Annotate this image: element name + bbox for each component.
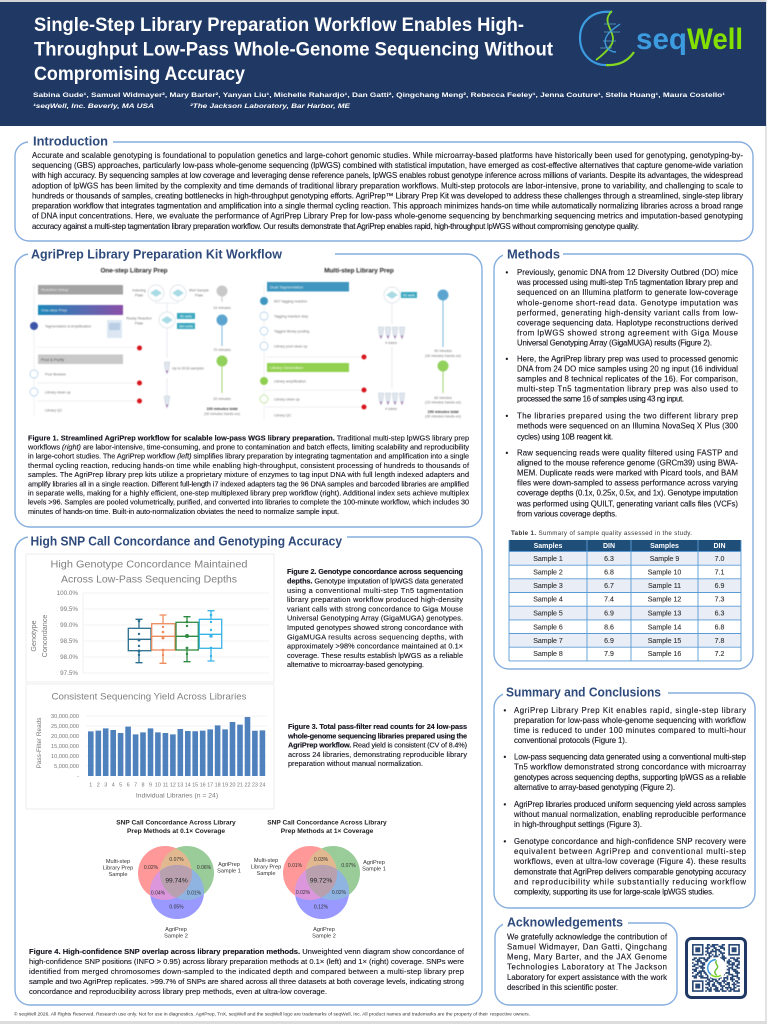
table: sample quality: 6.7	[604, 583, 614, 590]
table: sample quality: 7.0	[715, 556, 724, 563]
summary bullets: preparation for low-pass whole-genome sequencing with workflow	[514, 716, 746, 725]
chart: venn diagram at 0.1x coverage: 0.07%	[169, 857, 184, 863]
chart: venn diagram at 1x coverage: Library Prep	[251, 864, 281, 870]
summary bullets: time is reduced to under 100 minutes compared to multi-hour	[514, 726, 746, 735]
multi-step workflow: Tagged library pooling	[274, 330, 309, 334]
figure 2 caption: Universal Genotyping Array (GigaMUGA) genotypes.	[287, 614, 463, 623]
multi-step workflow: Library QC	[274, 414, 292, 418]
chart: pass-filter reads bar chart: 5,000,000	[54, 764, 79, 770]
multi-step workflow: Multi-step Library Prep	[324, 268, 394, 274]
chart: genotype concordance box plot: 99.5%	[60, 606, 78, 613]
methods bullets: sequenced on an Illumina platform to generate low-coverage	[517, 288, 738, 297]
summary bullets: •	[504, 837, 506, 846]
chart: venn diagram at 0.1x coverage: Prep Methods at 0.1× Coverage	[127, 828, 225, 835]
chart: pass-filter reads bar chart: 8	[142, 782, 144, 788]
chart: genotype concordance box plot: 98.5%	[60, 638, 78, 645]
chart: genotype concordance box plot: High Genotype Concordance Maintained	[50, 560, 248, 570]
summary bullets: AgriPrep libraries produced uniform sequencing yield across samples	[514, 800, 746, 809]
one-step workflow: Plate	[135, 294, 143, 298]
affiliations	[33, 103, 351, 110]
table: sample quality	[509, 540, 741, 661]
chart: pass-filter reads bar chart: 24	[259, 782, 265, 788]
summary bullets: equivalent between AgriPrep and conventional multi-step	[514, 847, 747, 856]
one-step workflow: Plate	[195, 294, 203, 298]
chart: pass-filter reads bar chart: Individual Libraries (n = 24)	[136, 792, 218, 800]
table: sample quality: Sample 7	[533, 638, 563, 645]
figure 4 caption: sample and two AgriPrep replicates. >99.7% of SNPs are shared across all three datasets at both coverage levels, indicating strong	[29, 977, 464, 986]
text: introduction body: adoption of lpWGS has been limited by the complexity and time demands of traditional library preparation workflows. Multi-step protocols are labor-intensive, prone to variability, and challenging to scale to	[32, 181, 744, 190]
text: introduction body: preparation workflow that integrates tagmentation and amplification into a single thermal cycling reaction. This approach minimizes hands-on time while automatically normalizing libraries across a broad range	[32, 202, 743, 210]
chart: pass-filter reads bar chart: 5	[119, 782, 122, 788]
figure 1 caption: in large-cohort studies. The AgriPrep workflow (left) simplifies library preparation by integrating tagmentation and amplification into a single	[28, 452, 469, 461]
multi-step workflow: (45 minutes hands-on)	[425, 414, 461, 418]
chart: pass-filter reads bar chart: 20	[230, 782, 236, 788]
one-step workflow: 384 wells	[179, 324, 193, 328]
box: 1x	[199, 611, 222, 661]
table caption: Table 1. Summary of sample quality assessed in the study.	[511, 530, 692, 537]
multi-step workflow: Tagging reaction stop	[274, 314, 308, 318]
figure 1 caption: in separate wells, making for a highly efficient, one-step multiplexed library prep workflow (right). Additional index sets achieve multiplex	[28, 488, 469, 497]
chart: venn diagram at 1x coverage: 0.01%	[288, 863, 303, 869]
methods bullets: whole-genome short-read data. Genotype imputation was	[516, 298, 738, 307]
chart: pass-filter reads bar chart: 21	[237, 782, 243, 788]
chart: venn diagram at 1x coverage	[251, 819, 387, 940]
one-step workflow: One-step Prep	[41, 308, 68, 312]
icon: QR code	[686, 938, 746, 998]
figure 3 caption: preparation without manual normalization.	[288, 759, 423, 768]
figure 2 caption: depths. Genotype imputation of lpWGS data generated	[287, 576, 463, 586]
chart: pass-filter reads bar chart: 14	[185, 782, 191, 788]
figure 1: workflow diagrams	[30, 268, 461, 420]
methods bullets: DNA from 24 DO mice samples using 20 ng input (16 individual	[517, 364, 738, 374]
title	[34, 14, 553, 85]
summary bullets: and reproducibility while substantially reducing workflow	[514, 878, 746, 886]
figure 2 caption: library preparation workflow produced high-density	[287, 595, 463, 604]
chart: venn diagram at 1x coverage: 0.03%	[314, 857, 329, 863]
panel: introduction	[15, 134, 753, 241]
figure 3 caption: Figure 3. Total pass-filter read counts for 24 low-pass	[288, 722, 467, 731]
figure 3 caption	[287, 722, 467, 768]
figure 2 caption: Figure 2. Genotype concordance across sequencing	[287, 567, 463, 576]
table: sample quality: Sample 12	[648, 596, 681, 604]
box: 0.5x	[176, 617, 198, 662]
one-step workflow: Library QC	[45, 408, 63, 412]
chart: pass-filter reads bar chart: 22	[244, 782, 250, 788]
footer: respective owners.	[490, 1012, 530, 1016]
chart: venn diagram at 0.1x coverage: 0.04%	[151, 890, 166, 896]
table: sample quality: 6.8	[604, 570, 614, 576]
table: sample quality: Sample 11	[648, 583, 681, 590]
text: introduction body	[31, 151, 744, 231]
table: sample quality: Sample 13	[648, 610, 681, 618]
box: 0.1x	[128, 619, 151, 663]
methods bullets: •	[506, 412, 508, 420]
multi-step workflow: Library clean up	[274, 398, 300, 402]
summary bullets: workflows, even at ultra-low coverage (Figure 4). these results	[513, 857, 746, 866]
table: sample quality: 7.3	[715, 596, 724, 604]
multi-step workflow: 90 minutes	[434, 349, 452, 353]
chart: pass-filter reads bar chart: 25,000,000	[51, 724, 79, 730]
acknowledgements text: described in this scientific poster.	[507, 983, 618, 992]
figure 2 caption: GigaMUGA results across sequencing depths, with	[287, 632, 463, 641]
chart: genotype concordance box plot: 99.0%	[60, 622, 78, 629]
one-step workflow: 10 minutes	[213, 306, 231, 310]
chart: genotype concordance box plot: 100.0%	[57, 590, 78, 597]
methods bullets: aligned to the mouse reference genome (GRCm39) using BWA-	[517, 458, 738, 468]
figure 1 caption: levels >96. Samples are pooled volumetrically, purified, and converted into libraries to complete the 100-minute workflow, which includes 30	[28, 498, 469, 507]
authors: Sabina Gude¹, Samuel Widmayer², Mary Barter², Yanyan Liu¹, Michelle Rahardjo¹, Dan Gatti², Qingchang Meng², Rebecca Feeley¹, Jenna Couture¹, Stella Huang¹, Maura Costello¹	[33, 92, 725, 99]
text: introduction body: Accurate and scalable genotyping is foundational to population genetics and large-cohort genomic studies. While microarray-based platforms have historically been used for genotyping, genotyping-by-	[32, 151, 743, 160]
chart: pass-filter reads bar chart: Consistent Sequencing Yield Across Libraries	[52, 692, 247, 702]
table: sample quality: 7.8	[715, 638, 724, 645]
chart: pass-filter reads bar chart: 19	[222, 782, 228, 788]
chart: pass-filter reads bar chart: 15,000,000	[51, 744, 79, 750]
methods bullets: processed the same 16 of samples using 43 ng input.	[517, 394, 684, 404]
figure 2 caption: using a conventional multi-step Tn5 tagmentation	[287, 586, 463, 595]
chart: venn diagram at 1x coverage: 0.02%	[332, 890, 347, 896]
chart: venn diagram at 1x coverage: Multi-step	[254, 858, 278, 864]
acknowledgements text: Meng, Mary Barter, and the JAX Genome	[507, 952, 667, 962]
figure 1 caption: samples. The AgriPrep library prep kits utilize a proprietary mixture of enzymes to tag input DNA with full length indexed adapters and	[28, 470, 469, 479]
chart: venn diagram at 0.1x coverage: 99.74%	[165, 878, 188, 885]
chart: pass-filter reads bar chart: 11	[163, 782, 168, 788]
figure 2 caption: coverage. These results establish lpWGS as a reliable	[287, 651, 463, 660]
table: sample quality: 6.9	[715, 583, 724, 590]
affiliations: ¹seqWell, Inc. Beverly, MA USA	[33, 103, 154, 110]
one-step workflow: Up to 9216 samples	[172, 366, 204, 370]
acknowledgements text: Laboratory for expert assistance with the work	[507, 973, 667, 982]
chart: pass-filter reads bar chart: 1	[89, 782, 92, 788]
footer: © seqWell 2026. All Rights Reserved. Research use only. Not for use in diagnostics. AgriPrep, TnX, seqWell and the seqWell logo are trademarks of seqWell, Inc. All product names and trademarks are the property of their	[14, 1012, 489, 1016]
summary bullets: Tn5 workflow demonstrated strong concordance with microarray	[514, 762, 746, 771]
figure 3 caption: AgriPrep workflow. Read yield is consistent (CV of 8.4%)	[288, 741, 467, 750]
figure 4 caption: identified from merged chromosomes down-sampled to the indicated depth and compared between a multi-step library prep	[29, 967, 464, 976]
methods bullets: Raw sequencing reads were quality filtered using FASTP and	[517, 448, 738, 458]
summary bullets: alternative to array-based genotyping (Figure 2).	[514, 783, 675, 792]
one-step workflow: 100 minutes total	[206, 407, 238, 411]
methods bullets	[506, 268, 739, 518]
table: sample quality: Sample 15	[648, 638, 681, 645]
methods bullets: coverage sequencing data. Haplotype reconstructions derived	[517, 318, 738, 327]
one-step workflow: (30 minutes hands-on)	[204, 412, 240, 416]
acknowledgements text: We gratefully acknowledge the contribution of	[507, 932, 668, 942]
summary bullets: conventional protocols (Figure 1).	[514, 736, 627, 745]
multi-step workflow: Library amplification	[274, 380, 306, 384]
chart: venn diagram at 1x coverage: SNP Call Concordance Across Library	[267, 819, 387, 826]
heading: SNP concordance: High SNP Call Concordance and Genotyping Accuracy	[30, 534, 342, 548]
methods bullets: The libraries prepared using the two different library prep	[517, 412, 739, 420]
chart: venn diagram at 0.1x coverage: 0.02%	[144, 865, 159, 871]
chart: pass-filter reads bar chart: 4	[112, 782, 115, 788]
table: sample quality: DIN	[713, 543, 726, 550]
chart: pass-filter reads bar chart: 18	[215, 782, 221, 788]
multi-step workflow: Library pool clean up	[274, 344, 307, 348]
acknowledgements text	[507, 932, 668, 992]
chart: pass-filter reads bar chart: 10,000,000	[51, 754, 79, 760]
chart: pass-filter reads bar chart: 12	[170, 782, 176, 788]
icon: seqWell logo	[580, 11, 743, 65]
heading: methods: Methods	[507, 248, 560, 262]
multi-step workflow: 150 minutes total	[427, 410, 459, 414]
panel: SNP concordance and genotyping accuracy	[15, 531, 482, 1005]
methods bullets: Universal Genotyping Array (GigaMUGA) results (Figure 2).	[517, 339, 712, 348]
text: introduction body: sequencing (GBS) approaches, particularly low-pass whole-genome sequencing (lpWGS) combined with statistical imputation, have emerged as cost-effective alternatives that capture genome-wide variation	[32, 161, 743, 170]
table: sample quality: Sample 1	[533, 556, 563, 563]
table: sample quality: Sample 16	[648, 651, 681, 658]
title: Throughput Low-Pass Whole-Genome Sequencing Without	[34, 38, 553, 60]
chart: genotype concordance box plot: Genotype	[29, 620, 38, 652]
methods bullets: •	[506, 354, 508, 364]
figure 4 caption	[29, 947, 465, 996]
chart: genotype concordance box plot	[26, 554, 274, 682]
chart: venn diagram at 1x coverage: 0.12%	[314, 905, 329, 911]
table: sample quality: 7.2	[715, 651, 724, 658]
figure 2 caption: variant calls with strong concordance to Giga Mouse	[287, 604, 463, 613]
multi-step workflow: 96 wells	[403, 293, 415, 297]
table: sample quality: 6.3	[604, 556, 614, 563]
chart: venn diagram at 1x coverage: Sample	[257, 871, 275, 877]
figure 1 caption: Figure 1. Streamlined AgriPrep workflow for scalable low-pass WGS library preparation. Traditional multi-step lpWGS library prep	[28, 433, 469, 442]
one-step workflow: Tagmentation & Amplification	[45, 324, 91, 328]
methods bullets: from various coverage depths.	[517, 509, 617, 518]
chart: pass-filter reads bar chart: 10	[155, 782, 161, 788]
panel: summary and conclusions	[494, 686, 755, 908]
title: Compromising Accuracy	[34, 63, 245, 85]
one-step workflow: One-step Library Prep	[100, 268, 168, 274]
multi-step workflow: 4 tubes	[385, 407, 397, 411]
chart: genotype concordance box plot: Concordance	[40, 615, 49, 657]
figure 3 caption: across 24 libraries, demonstrating reproducible library	[288, 750, 467, 759]
heading: workflow: AgriPrep Library Preparation Kit Workflow	[31, 248, 282, 262]
summary bullets: •	[504, 800, 506, 809]
summary bullets: in high-throughput settings (Figure 3).	[514, 820, 642, 829]
methods bullets: samples and 8 technical replicates of the 16). For comparison,	[517, 374, 738, 384]
title: Single-Step Library Preparation Workflow Enables High-	[34, 14, 524, 36]
summary bullets: •	[504, 752, 506, 761]
table: sample quality: 6.9	[604, 610, 614, 618]
chart: venn diagram at 1x coverage: AgriPrep	[363, 860, 385, 866]
multi-step workflow: i5/i7 tagging reaction	[274, 300, 307, 304]
methods bullets: multi-step Tn5 tagmentation library prep was also used to	[517, 384, 739, 394]
table: sample quality: Sample 9	[650, 556, 679, 563]
multi-step workflow	[260, 268, 461, 420]
chart: pass-filter reads bar chart: 7	[134, 782, 137, 788]
figure 1 caption: amplify libraries all in a single reaction. Different full-length i7 indexed adapters tag the 96 DNA samples and barcoded libraries are amplified	[28, 479, 469, 488]
one-step workflow: Pool & Purify	[41, 357, 64, 362]
one-step workflow: 70 minutes	[213, 348, 231, 352]
table: sample quality: DIN	[603, 543, 615, 550]
chart: venn diagram at 0.1x coverage: Sample 1	[217, 868, 241, 874]
panel: methods	[494, 248, 753, 669]
chart: venn diagram at 1x coverage: 0.02%	[296, 890, 311, 896]
chart: venn diagram at 1x coverage: Sample 2	[312, 934, 336, 940]
table: sample quality: Sample 2	[533, 570, 563, 576]
chart: genotype concordance box plot: 97.5%	[60, 670, 78, 677]
chart: venn diagram at 1x coverage: Sample 1	[362, 866, 386, 872]
summary bullets	[504, 706, 747, 896]
chart: pass-filter reads bar chart: 20,000,000	[51, 734, 79, 740]
table: sample quality: 6.3	[715, 610, 724, 618]
figure 4 caption: concordance and reproducibility across library prep methods, even at ultra-low coverage.	[29, 987, 327, 996]
summary bullets: •	[504, 706, 506, 715]
chart: venn diagram at 1x coverage: 99.72%	[310, 878, 332, 885]
multi-step workflow: Dual Tagmentation	[270, 284, 303, 290]
heading: introduction: Introduction	[33, 134, 108, 148]
heading: acknowledgements: Acknowledgements	[507, 916, 623, 930]
chart: venn diagram at 1x coverage: Prep Methods at 1× Coverage	[281, 828, 374, 835]
multi-step workflow: (30 minutes hands-on)	[425, 354, 461, 358]
chart: venn diagram at 1x coverage: AgriPrep	[313, 927, 335, 933]
methods bullets: Previously, genomic DNA from 12 Diversity Outbred (DO) mice	[517, 268, 738, 277]
figure 1 caption	[27, 433, 470, 516]
text: introduction body: hundreds or thousands of samples, creating bottlenecks in high-throughput genotyping efforts. AgriPrep™ Library Prep Kit was developed to address these challenges through a streamlined, single-step library	[32, 191, 743, 200]
methods bullets: was processed using multi-step Tn5 tagmentation library prep and	[516, 278, 738, 287]
chart: venn diagram at 0.1x coverage: AgriPrep	[218, 862, 240, 868]
table: sample quality: 8.6	[604, 624, 614, 632]
methods bullets: files were down-sampled to assess performance across varying	[517, 478, 738, 488]
figure 2 caption: alternative to microarray-based genotyping.	[287, 660, 424, 669]
summary bullets: demonstrate that AgriPrep delivers comparable genotyping accuracy	[514, 868, 746, 876]
chart: venn diagram at 0.1x coverage: SNP Call Concordance Across Library	[116, 819, 236, 826]
affiliations: ²The Jackson Laboratory, Bar Harbor, ME	[190, 103, 351, 110]
methods bullets: •	[506, 268, 508, 277]
chart: venn diagram at 0.1x coverage: 0.01%	[187, 890, 202, 896]
one-step workflow: Library clean up	[45, 390, 71, 394]
methods bullets: Here, the AgriPrep library prep was used to processed genomic	[517, 354, 738, 364]
multi-step workflow: (15 minutes hands-on)	[425, 400, 461, 404]
text: introduction body: of DNA input concentrations. Here, we evaluate the performance of AgriPrep Library Prep for low-pass whole-genome sequencing by benchmarking sequencing metrics and imputation-based genotyping	[32, 212, 743, 221]
chart: venn diagram at 0.1x coverage: 0.05%	[169, 905, 184, 911]
box: 0.25x	[152, 615, 175, 663]
one-step workflow: 20 minutes	[213, 397, 231, 401]
chart: pass-filter reads bar chart: 13	[177, 782, 183, 788]
table: sample quality: 6.8	[715, 624, 724, 632]
text: introduction body: with high accuracy. By sequencing samples at low coverage and leveraging dense reference panels, lpWGS enables robust genotype inference across millions of variants. Despite its advantages, the widespread	[31, 171, 743, 180]
chart: pass-filter reads bar chart: 9	[149, 782, 152, 788]
table: sample quality: Sample 4	[533, 596, 563, 604]
summary bullets: Low-pass sequencing data generated using a conventional multi-step	[514, 752, 747, 761]
table: sample quality: Samples	[650, 543, 679, 550]
one-step workflow	[30, 268, 240, 416]
acknowledgements text: Samuel Widmayer, Dan Gatti, Qingchang	[507, 942, 667, 952]
chart: venn diagram at 0.1x coverage: AgriPrep	[165, 927, 187, 933]
one-step workflow: Pool libraries	[45, 372, 66, 376]
table: sample quality: Sample 3	[533, 583, 563, 590]
text: introduction body: accuracy against a multi-step tagmentation library preparation workflow. Our results demonstrate that AgriPrep enables rapid, high-throughput lpWGS without compromising genotype quality.	[32, 222, 639, 231]
chart: pass-filter reads bar chart	[26, 684, 274, 809]
methods bullets: coverage depths (0.1x, 0.25x, 0.5x, and 1x). Genotype imputation	[517, 488, 738, 498]
one-step workflow: 96 wells	[180, 314, 192, 318]
methods bullets: •	[506, 448, 508, 458]
icon: seqWell logo: seq	[636, 23, 687, 56]
summary bullets: genotypes across sequencing depths, supporting lpWGS as a reliable	[514, 773, 746, 782]
one-step workflow: Ready Reaction	[126, 316, 152, 320]
chart: venn diagram at 0.1x coverage	[103, 819, 241, 940]
multi-step workflow: 4 tubes	[385, 341, 397, 345]
table: sample quality: Sample 5	[533, 610, 563, 618]
methods bullets: methods were sequenced on an Illumina NovaSeq X Plus (300	[517, 422, 739, 430]
table: sample quality: 7.4	[604, 596, 614, 604]
chart: pass-filter reads bar chart: 30,000,000	[51, 714, 79, 720]
one-step workflow: Indexing	[132, 288, 146, 292]
figure 2 caption: Imputed genotypes showed strong concordance with	[287, 623, 463, 632]
methods bullets: cycles) using 10B reagent kit.	[517, 432, 613, 441]
chart: pass-filter reads bar chart: 6	[127, 782, 130, 788]
summary bullets: Genotype concordance and high-confidence SNP recovery were	[514, 837, 746, 846]
chart: pass-filter reads bar chart: Pass-Filter Reads	[36, 718, 43, 768]
chart: pass-filter reads bar chart: 17	[207, 782, 213, 788]
multi-step workflow: Library Generation	[270, 365, 303, 370]
chart: venn diagram at 0.1x coverage: Library Prep	[103, 866, 133, 872]
figure 2 caption	[287, 567, 463, 669]
figure 2 caption: approximately >98% concordance maintained at 0.1×	[287, 642, 463, 651]
table: sample quality: Samples	[534, 543, 563, 550]
chart: venn diagram at 0.1x coverage: 0.06%	[197, 865, 212, 871]
chart: venn diagram at 0.1x coverage: Sample 2	[164, 934, 188, 940]
chart: pass-filter reads bar chart: -	[77, 774, 79, 780]
table: sample quality: Sample 14	[648, 624, 681, 632]
methods bullets: was performed using QUILT, generating variant calls files (VCFs)	[516, 499, 738, 508]
chart: pass-filter reads bar chart: 3	[104, 782, 107, 788]
chart: pass-filter reads bar chart: 2	[97, 782, 100, 788]
summary bullets: AgriPrep Library Prep Kit enables rapid, single-step library	[514, 706, 746, 715]
panel: AgriPrep workflow	[15, 248, 482, 527]
chart: genotype concordance box plot: 98.0%	[60, 654, 78, 661]
figure 1 caption: workflows (right) are labor-intensive, time-consuming, and prone to contamination and batch effects, limiting scalability and reproducibility	[27, 442, 469, 452]
methods bullets: MEM. Duplicate reads were marked with Picard tools, and BAM	[517, 468, 738, 478]
figure 1 caption: minutes of hands-on time. Built-in auto-normalization obviates the need to normalize sample input.	[28, 507, 339, 516]
one-step workflow: Reaction Setup	[41, 287, 69, 292]
table: sample quality: Sample 10	[648, 570, 681, 576]
chart: venn diagram at 0.1x coverage: Sample	[109, 872, 127, 878]
table: sample quality: 6.9	[604, 638, 614, 645]
chart: venn diagram at 1x coverage: 0.07%	[341, 863, 356, 869]
one-step workflow: Plate	[135, 322, 143, 326]
acknowledgements text: Technologies Laboratory at The Jackson	[507, 962, 667, 972]
heading: summary: Summary and Conclusions	[506, 686, 661, 700]
chart: pass-filter reads bar chart: 16	[200, 782, 206, 788]
panel: acknowledgements	[495, 916, 677, 1005]
table: sample quality: 7.1	[715, 570, 724, 576]
figure 1 caption: thermal cycling reaction, reducing hands-on time while enabling high-throughput, consistent processing of hundreds to thousands of	[28, 461, 470, 470]
methods bullets: from lpWGS showed strong agreement with Giga Mouse	[517, 328, 738, 337]
chart: venn diagram at 0.1x coverage: Multi-step	[106, 859, 130, 865]
chart: genotype concordance box plot: Across Low-Pass Sequencing Depths	[61, 574, 237, 586]
summary bullets: complexity, supporting its use for large-scale lpWGS studies.	[514, 888, 714, 896]
chart: pass-filter reads bar chart: 23	[252, 782, 258, 788]
figure 4 caption: Figure 4. High-confidence SNP overlap across library preparation methods. Unweighted venn diagram show concordance of	[29, 947, 465, 956]
figure 4 caption: high-confidence SNP positions (INFO > 0.95) across library preparation methods at 0.1× (left) and 1× (right) coverage. SNPs were	[29, 957, 464, 966]
methods bullets: performed, generating high-density variant calls from low-	[517, 308, 738, 317]
table: sample quality: Sample 8	[533, 651, 563, 658]
icon: seqWell logo: Well	[687, 23, 743, 56]
one-step workflow: tRef Sample	[189, 288, 209, 292]
chart: pass-filter reads bar chart: 15	[192, 782, 198, 788]
header banner	[0, 2, 766, 126]
multi-step workflow: 60 minutes	[434, 396, 452, 400]
table: sample quality: Sample 6	[533, 624, 563, 632]
table: sample quality: 7.9	[604, 651, 614, 658]
summary bullets: without manual normalization, enabling reproducible performance	[513, 810, 746, 819]
figure 3 caption: whole-genome sequencing libraries prepared using the	[287, 731, 467, 740]
